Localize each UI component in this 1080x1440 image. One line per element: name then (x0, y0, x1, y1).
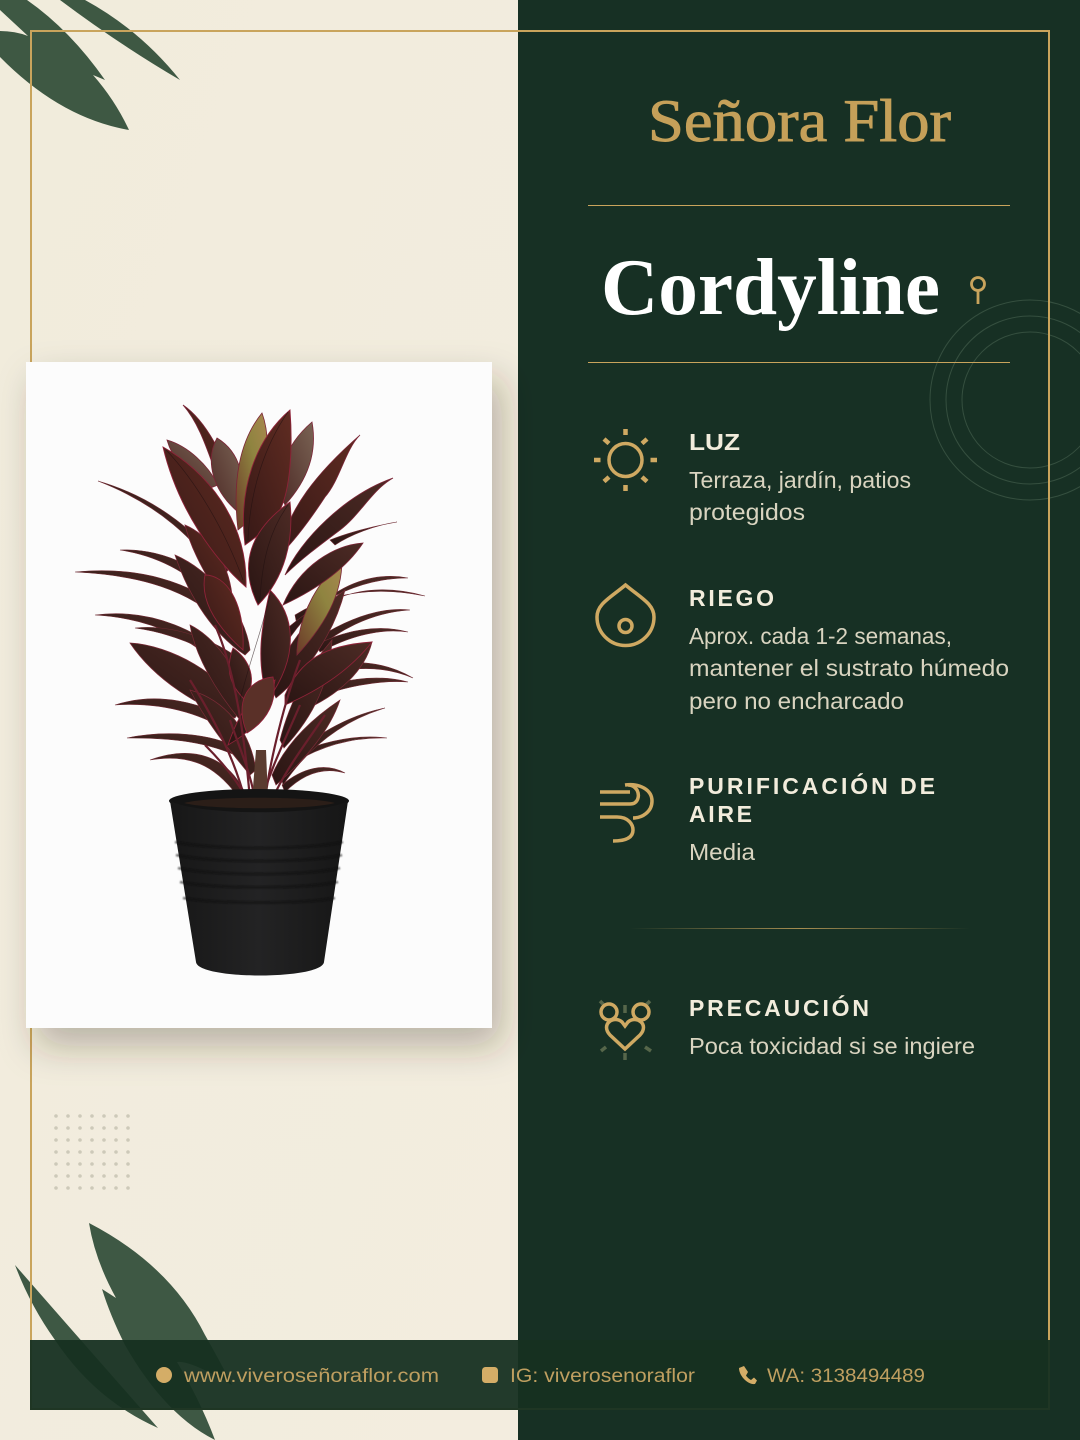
text: riego: RIEGO (689, 585, 774, 611)
leaves: bottom-left corner (15, 1223, 232, 1440)
text: luz: LUZ (689, 429, 740, 455)
plant: back top leaves (167, 405, 393, 655)
leaves: top-left corner (0, 0, 180, 130)
text: riego: Aprox. cada 1-2 semanas, (689, 623, 952, 649)
text: purificacion de aire (689, 772, 935, 865)
plant: thin back leaves (75, 481, 425, 802)
icon: water drop (597, 585, 654, 646)
text: precaucion: Poca toxicidad si se ingiere (689, 1033, 975, 1059)
text: purificacion de aire: AIRE (689, 801, 752, 827)
footer: website: www.viveroseñoraflor.com (183, 1366, 439, 1387)
plant: front large leaves (163, 410, 372, 745)
decorative concentric rings (930, 300, 1080, 500)
text: precaucion: PRECAUCIÓN (689, 994, 869, 1021)
footer: phone: WA: 3138494489 (767, 1366, 925, 1387)
footer: instagram: IG: viverosenoraflor (510, 1366, 696, 1387)
plant: leaf veins and stems (190, 625, 325, 800)
icon: wind (600, 785, 652, 841)
icon: heart with circles (600, 1001, 651, 1060)
text: precaucion (689, 994, 975, 1059)
text: riego: mantener el sustrato húmedo (689, 655, 1009, 681)
icon: instagram square (482, 1367, 498, 1383)
title: brand name: Señora Flor (648, 88, 951, 154)
text: luz (689, 429, 911, 525)
text: purificacion de aire: PURIFICACIÓN DE (689, 772, 935, 799)
text: riego (689, 585, 1009, 714)
text: luz: Terraza, jardín, patios (689, 467, 911, 493)
footer bar (30, 1340, 1050, 1410)
divider: under plant name (588, 362, 1010, 363)
text: purificacion de aire: Media (689, 839, 755, 865)
photo: potted cordyline plant (26, 362, 492, 1028)
text: riego: pero no encharcado (689, 688, 904, 714)
divider: before caution (630, 928, 970, 929)
icon: web dot (156, 1367, 172, 1383)
divider: under brand (588, 205, 1010, 206)
plant: lower leaves (130, 555, 372, 785)
plant: trunk (252, 750, 268, 800)
panel: dark green info panel (518, 0, 1080, 1440)
plant: black ribbed pot (169, 789, 349, 976)
heading: plant name: Cordyline (601, 244, 940, 332)
icon: small pin (972, 278, 984, 304)
icon: sun (594, 429, 657, 491)
text: luz: protegidos (689, 499, 805, 525)
icon: phone (739, 1366, 757, 1384)
dot pattern (54, 1114, 130, 1190)
panel: cream background (0, 0, 518, 1440)
